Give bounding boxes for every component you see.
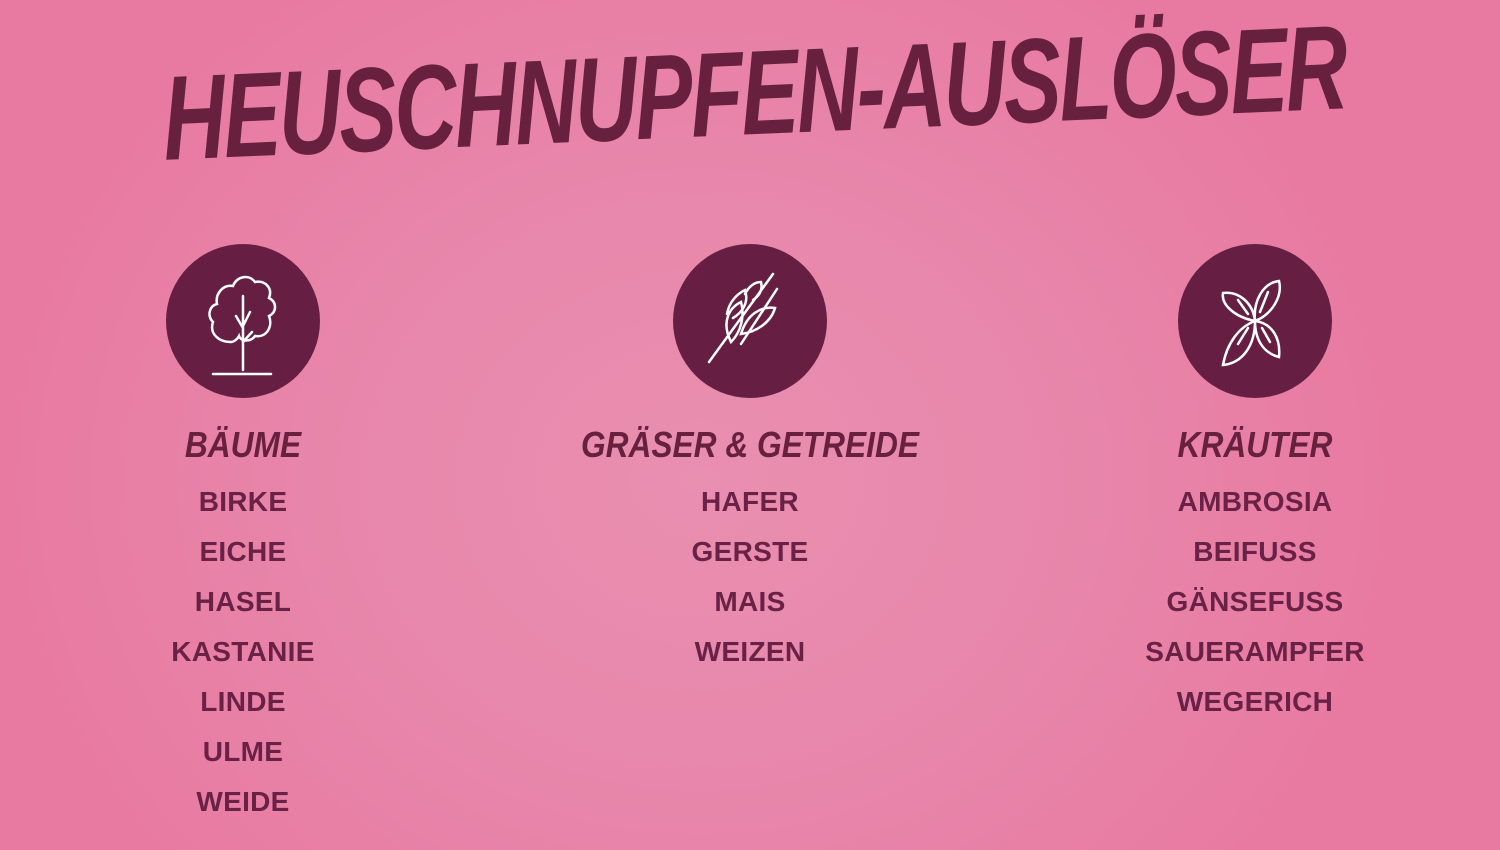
panel: Bäume [166,244,320,817]
list: KASTANIE [171,636,315,667]
title: HEUSCHNUPFEN-AUSLÖSER [160,0,1348,186]
list: SAUERAMPFER [1145,636,1365,667]
heading: KRÄUTER [1178,424,1332,465]
list: HAFER [701,486,799,517]
heading: GRÄSER & GETREIDE [581,424,919,465]
list: WEIDE [196,786,290,817]
icon: tree [166,244,320,398]
list: GÄNSEFUSS [1167,586,1343,617]
list [171,486,315,817]
icon: herb leaves [1178,244,1332,398]
panel: Gräser & Getreide [581,244,920,667]
list: BEIFUSS [1193,536,1317,567]
icon: wheat [673,244,827,398]
heading: BÄUME [185,424,301,465]
list: BIRKE [199,486,287,517]
panel: Kräuter [1145,244,1365,717]
list: GERSTE [692,536,808,567]
list: ULME [203,736,283,767]
list [1145,486,1365,717]
list: MAIS [714,586,786,617]
list: EICHE [199,536,287,567]
list: LINDE [200,686,286,717]
list: WEGERICH [1177,686,1333,717]
list: AMBROSIA [1178,486,1332,517]
list [692,486,808,667]
list: WEIZEN [695,636,805,667]
list: HASEL [195,586,291,617]
